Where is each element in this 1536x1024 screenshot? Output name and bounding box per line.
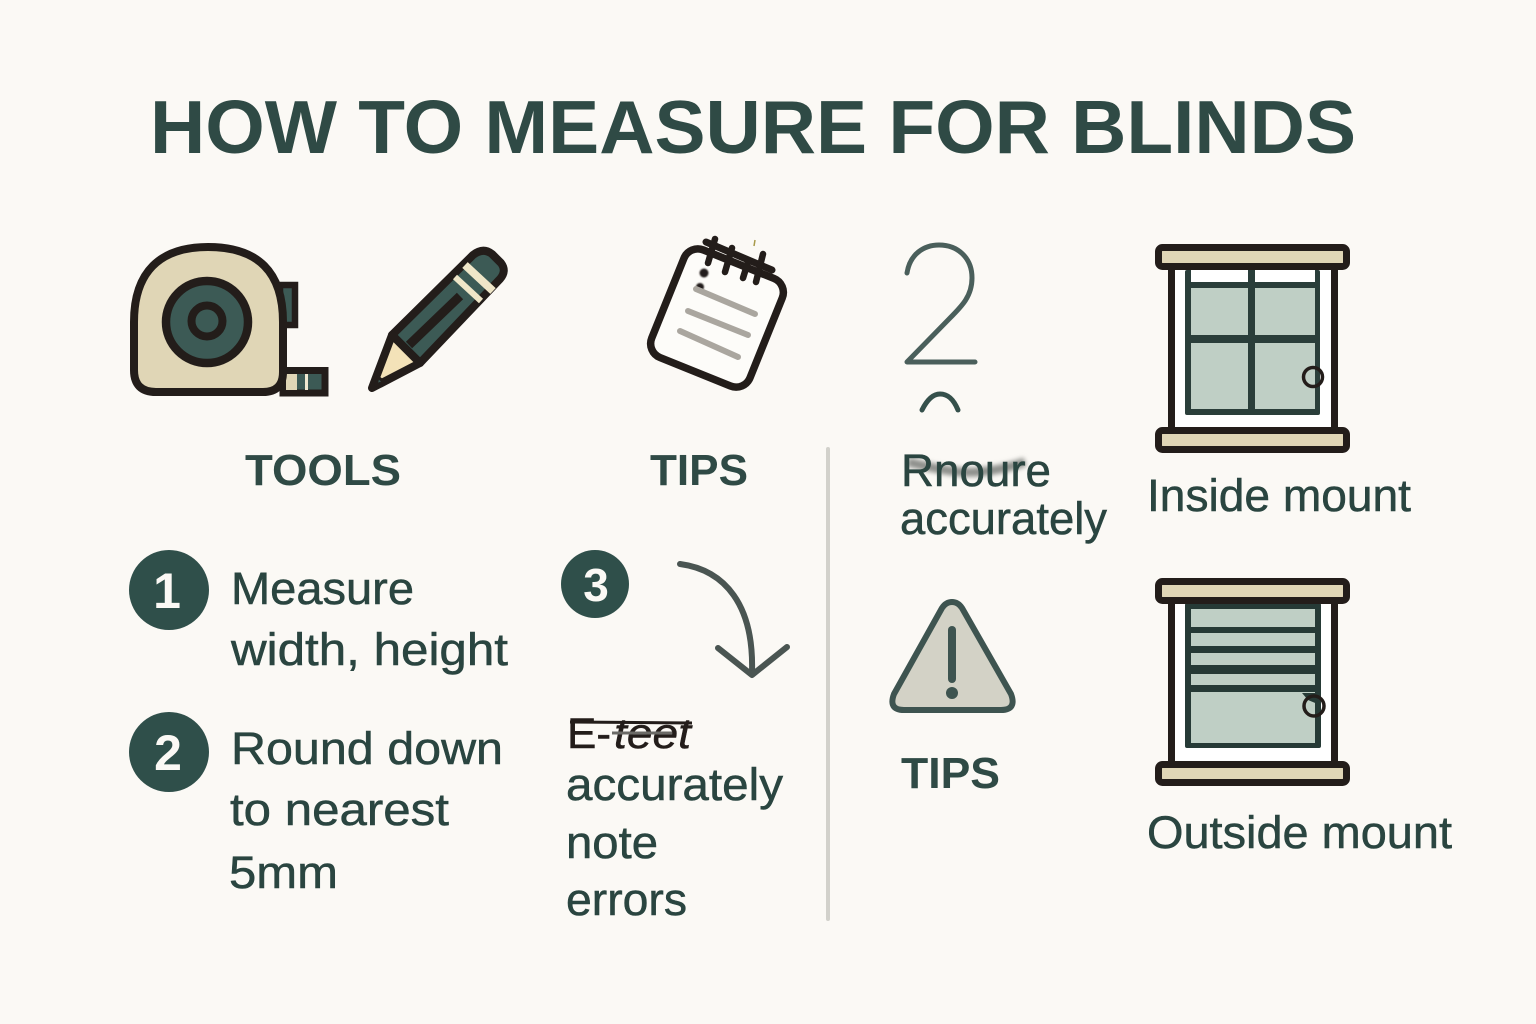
step 3 text: accurately xyxy=(566,759,784,810)
title: HOW TO MEASURE FOR BLINDS xyxy=(150,85,1356,169)
icon: numeral two with arc xyxy=(907,245,975,410)
step 2 text: to nearest xyxy=(230,784,450,835)
step 3 text: teet xyxy=(614,710,693,758)
icon: inside mount window xyxy=(1158,248,1346,450)
icon: warning triangle xyxy=(892,602,1013,710)
step 2 badge xyxy=(129,712,209,792)
arrow: curved down xyxy=(680,564,787,675)
step 1 badge xyxy=(129,550,209,630)
icon: pencil xyxy=(372,251,504,388)
text: rnoure accurately: accurately xyxy=(900,493,1108,544)
step 2 badge: 2 xyxy=(154,725,182,781)
step 1 text: Measure xyxy=(231,563,414,614)
heading: tips lower: TIPS xyxy=(901,749,1000,798)
step 3 badge xyxy=(561,550,629,618)
label: inside mount: Inside mount xyxy=(1147,470,1412,521)
step 3 text xyxy=(566,710,784,925)
step 2 text: Round down xyxy=(231,723,503,774)
label: outside mount: Outside mount xyxy=(1147,807,1453,858)
step 1 text: width, height xyxy=(230,624,509,675)
step 1 badge: 1 xyxy=(153,563,181,619)
heading: tools: TOOLS xyxy=(245,446,401,495)
text: rnoure accurately: Rnoure xyxy=(901,445,1051,496)
step 3 text: errors xyxy=(566,874,687,925)
step 2 text: 5mm xyxy=(229,847,338,898)
step 3 badge: 3 xyxy=(583,559,609,611)
step 3 text: note xyxy=(566,817,658,868)
icon: tape measure xyxy=(134,247,325,393)
icon: outside mount window with blind xyxy=(1158,582,1346,782)
heading: tips: TIPS xyxy=(650,446,748,495)
text: rnoure accurately xyxy=(900,445,1108,544)
step 3 text: E- xyxy=(567,710,611,758)
step 1 text xyxy=(230,563,509,675)
step 2 text xyxy=(229,723,503,898)
icon: notepad xyxy=(646,239,788,392)
